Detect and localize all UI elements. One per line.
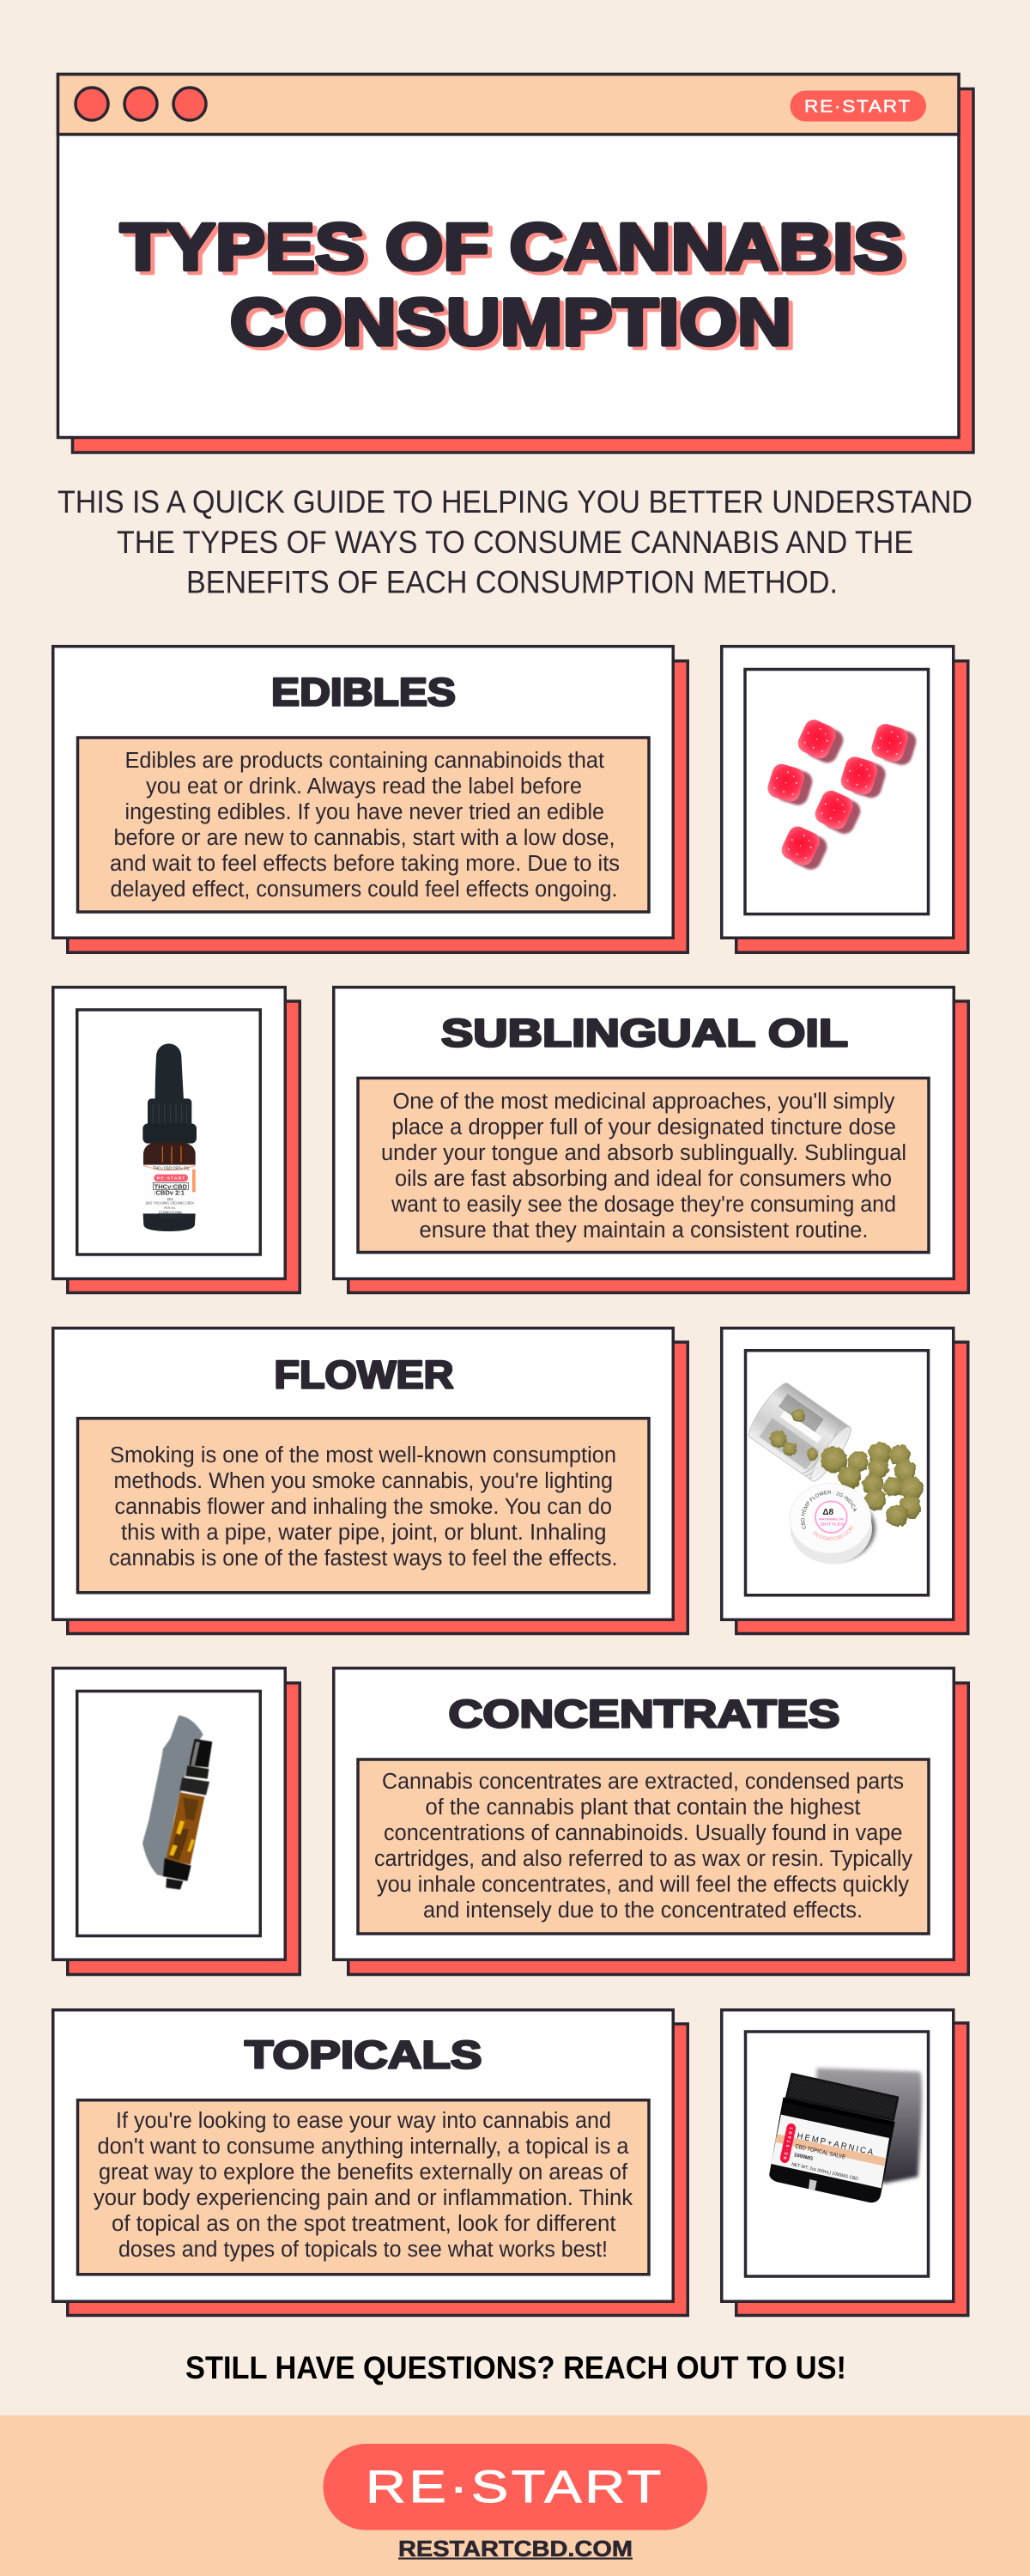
text box: flower: Smoking is one of the most well-known consumption — [110, 1443, 616, 1467]
card shadow — [68, 1342, 688, 1633]
icon: topical salve jar: RE·START — [783, 2127, 794, 2160]
panel: topicals text — [53, 2010, 688, 2315]
panel: edibles photo — [722, 647, 968, 952]
card shadow — [736, 661, 968, 952]
text box: edibles: you eat or drink. Always read the label before — [146, 775, 582, 799]
panel: concentrates photo — [53, 1668, 300, 1975]
card shadow — [736, 2023, 968, 2315]
card shadow — [348, 1683, 968, 1975]
icon: topical salve jar: HEMP+ARNICA — [796, 2131, 875, 2158]
window shadow — [72, 89, 973, 453]
panel: sublingual text — [334, 987, 968, 1293]
card shadow — [68, 1683, 300, 1975]
footer band — [0, 2415, 1030, 2576]
text box: sublingual oil: want to easily see the dosage they're consuming and — [391, 1193, 896, 1217]
card — [722, 1328, 954, 1619]
text box: topicals: don't want to consume anything internally, a topical is a — [98, 2135, 629, 2159]
text box: topicals: your body experiencing pain and or inflammation. Think — [94, 2186, 633, 2210]
text box: concentrates: and intensely due to the concentrated effects. — [423, 1899, 863, 1923]
card shadow — [68, 1001, 300, 1293]
text box: concentrates: of the cannabis plant that contain the highest — [426, 1795, 860, 1820]
footer logo: RE·START — [366, 2462, 664, 2512]
intro text — [58, 484, 972, 599]
icon: dropper bottle: 210MG/10ML — [159, 1210, 184, 1214]
lid — [790, 1483, 879, 1564]
panel: topicals photo — [722, 2010, 968, 2315]
text box: flower: this with a pipe, water pipe, joint, or blunt. Inhaling — [121, 1521, 606, 1545]
text box: flower: methods. When you smoke cannabis, you're lighting — [113, 1469, 613, 1493]
text box: edibles: ingesting edibles. If you have never tried an edible — [125, 800, 604, 824]
photo frame — [745, 1351, 929, 1595]
text box: sublingual oil — [358, 1078, 929, 1252]
logo pill: RE·START — [804, 98, 912, 117]
text box: topicals: great way to explore the benefits externally on areas of — [99, 2160, 628, 2184]
text box: sublingual oil: place a dropper full of your designated tincture dose — [391, 1115, 896, 1139]
title — [120, 210, 903, 359]
icon: topical salve jar: NET WT: 2oz (60mL) 1000MG CBD — [791, 2162, 858, 2182]
photo frame — [745, 670, 929, 914]
heading: edibles: EDIBLES — [271, 670, 456, 714]
text box: edibles — [77, 738, 649, 912]
card shadow — [348, 1001, 968, 1293]
icon: dropper bottle: 2MG THCv:8MG CBD:8MG CBDv — [145, 1201, 195, 1206]
text box: topicals: If you're looking to ease your way into cannabis and — [116, 2109, 611, 2133]
photo frame — [745, 2032, 929, 2276]
heading: sublingual oil: SUBLINGUAL OIL — [441, 1012, 848, 1054]
card shadow — [68, 661, 688, 952]
icon: dropper bottle: PER ML — [164, 1206, 176, 1210]
lid: Δ8 — [822, 1508, 834, 1517]
card — [53, 647, 673, 938]
icon: dropper bottle: :CBDv 2:1 — [154, 1191, 185, 1197]
panel: title window — [58, 74, 973, 453]
card shadow — [736, 1342, 968, 1633]
heading: flower: FLOWER — [275, 1353, 453, 1396]
icon: dropper bottle: RE·START — [157, 1176, 185, 1182]
text box: sublingual oil: One of the most medicinal approaches, you'll simply — [393, 1090, 895, 1114]
text box: edibles: delayed effect, consumers could feel effects ongoing. — [110, 878, 618, 902]
card shadow — [68, 2024, 688, 2315]
buds — [770, 1409, 924, 1527]
icon: dropper bottle: THCv:CBD:CBDv OIL — [153, 1167, 190, 1172]
call to action: STILL HAVE QUESTIONS? REACH OUT TO US! — [185, 2350, 846, 2385]
intro text: THIS IS A QUICK GUIDE TO HELPING YOU BETTER UNDERSTAND — [58, 484, 972, 519]
lid: CBD HEMP FLOWER · 2G INDICA — [801, 1491, 857, 1529]
photo frame — [77, 1010, 260, 1255]
text box: concentrates — [358, 1759, 929, 1934]
panel: concentrates text — [334, 1668, 968, 1975]
card — [53, 987, 285, 1279]
text box: concentrates: concentrations of cannabinoids. Usually found in vape — [384, 1821, 903, 1845]
icon: flower jar, buds and lid — [748, 1382, 924, 1564]
icon: dropper bottle: OIL — [167, 1197, 174, 1201]
icon: dropper bottle: THCv:CBD — [154, 1184, 187, 1190]
icon: topical salve jar — [770, 2068, 922, 2202]
text box: flower — [77, 1419, 649, 1593]
icon: dropper bottle: NET WT. ½ OZ — [160, 1214, 183, 1218]
footer url: RESTARTCBD.COM — [398, 2536, 633, 2561]
card — [722, 647, 954, 938]
card — [334, 987, 954, 1279]
text box: concentrates: cartridges, and also referred to as wax or resin. Typically — [374, 1847, 912, 1871]
card — [53, 2010, 673, 2301]
glass jar — [744, 1379, 856, 1485]
panel: sublingual photo — [53, 987, 300, 1293]
icon: topical salve jar: 1000MG — [793, 2153, 814, 2162]
intro text: THE TYPES OF WAYS TO CONSUME CANNABIS AND THE — [117, 525, 913, 560]
text box: edibles: and wait to feel effects before taking more. Due to its — [110, 852, 620, 876]
footer logo — [323, 2444, 707, 2530]
text box: topicals — [77, 2100, 649, 2275]
lid: WATERMELON — [819, 1518, 844, 1522]
heading: concentrates: CONCENTRATES — [448, 1692, 839, 1736]
text box: topicals: of topical as on the spot treatment, look for different — [112, 2212, 616, 2236]
card — [722, 2010, 954, 2301]
icon: window dots — [76, 88, 206, 120]
text box: sublingual oil: oils are fast absorbing and ideal for consumers who — [395, 1167, 892, 1191]
text box: flower: cannabis flower and inhaling the smoke. You can do — [115, 1495, 612, 1519]
panel: edibles text — [53, 647, 688, 952]
text box: concentrates: you inhale concentrates, and will feel the effects quickly — [377, 1873, 909, 1897]
text box: topicals: doses and types of topicals to see what works best! — [118, 2238, 608, 2262]
title: CONSUMPTION — [230, 285, 791, 359]
window body — [58, 74, 959, 438]
text box: concentrates: Cannabis concentrates are extracted, condensed parts — [382, 1770, 904, 1794]
card — [334, 1668, 954, 1959]
card — [53, 1668, 285, 1959]
window title bar — [58, 74, 959, 134]
photo frame — [77, 1692, 260, 1935]
panel: flower photo — [720, 1327, 970, 1635]
title: TYPES OF CANNABIS — [120, 210, 903, 284]
heading: topicals: TOPICALS — [245, 2033, 482, 2076]
icon: topical salve jar: CBD TOPICAL SALVE — [795, 2143, 846, 2160]
lid: ZKITTLES — [820, 1522, 844, 1527]
text box: edibles: Edibles are products containing cannabinoids that — [125, 749, 604, 773]
icon: red gummies — [761, 716, 923, 873]
text box: edibles: before or are new to cannabis, start with a low dose, — [113, 826, 615, 850]
logo pill — [790, 91, 926, 122]
text box: flower: cannabis is one of the fastest ways to feel the effects. — [109, 1546, 618, 1571]
text box: sublingual oil: ensure that they maintain a consistent routine. — [419, 1218, 869, 1242]
icon: dropper bottle — [142, 1043, 197, 1231]
panel: flower text — [53, 1328, 688, 1633]
intro text: BENEFITS OF EACH CONSUMPTION METHOD. — [186, 565, 838, 599]
card — [53, 1328, 673, 1619]
text box: sublingual oil: under your tongue and absorb sublingually. Sublingual — [381, 1141, 906, 1165]
icon: vape cartridge — [142, 1716, 212, 1890]
lid: RESTARTCBD.COM — [813, 1525, 853, 1540]
